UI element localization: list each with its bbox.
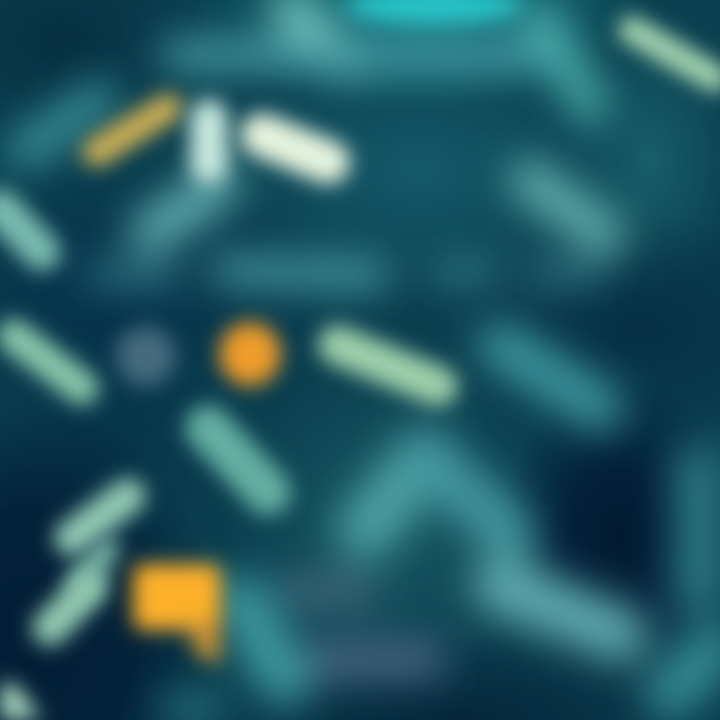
grey circle	[116, 326, 176, 386]
streak: lower left connector	[80, 550, 106, 585]
streak: lower center	[208, 428, 268, 492]
orange speech bubble	[133, 564, 222, 664]
streak: left upper	[0, 208, 42, 252]
white vertical blob	[190, 118, 228, 165]
pale green streak: top right	[632, 30, 715, 78]
orange circle	[219, 322, 281, 386]
streak: lower left top	[72, 496, 128, 538]
streak: left middle	[14, 336, 82, 388]
streak: bottom left corner	[0, 684, 42, 720]
white streak	[262, 135, 328, 162]
glow: top cyan	[345, 0, 525, 26]
yellow streak	[97, 108, 168, 152]
streak: lower left bottom	[50, 587, 90, 628]
streak: center	[338, 345, 438, 386]
